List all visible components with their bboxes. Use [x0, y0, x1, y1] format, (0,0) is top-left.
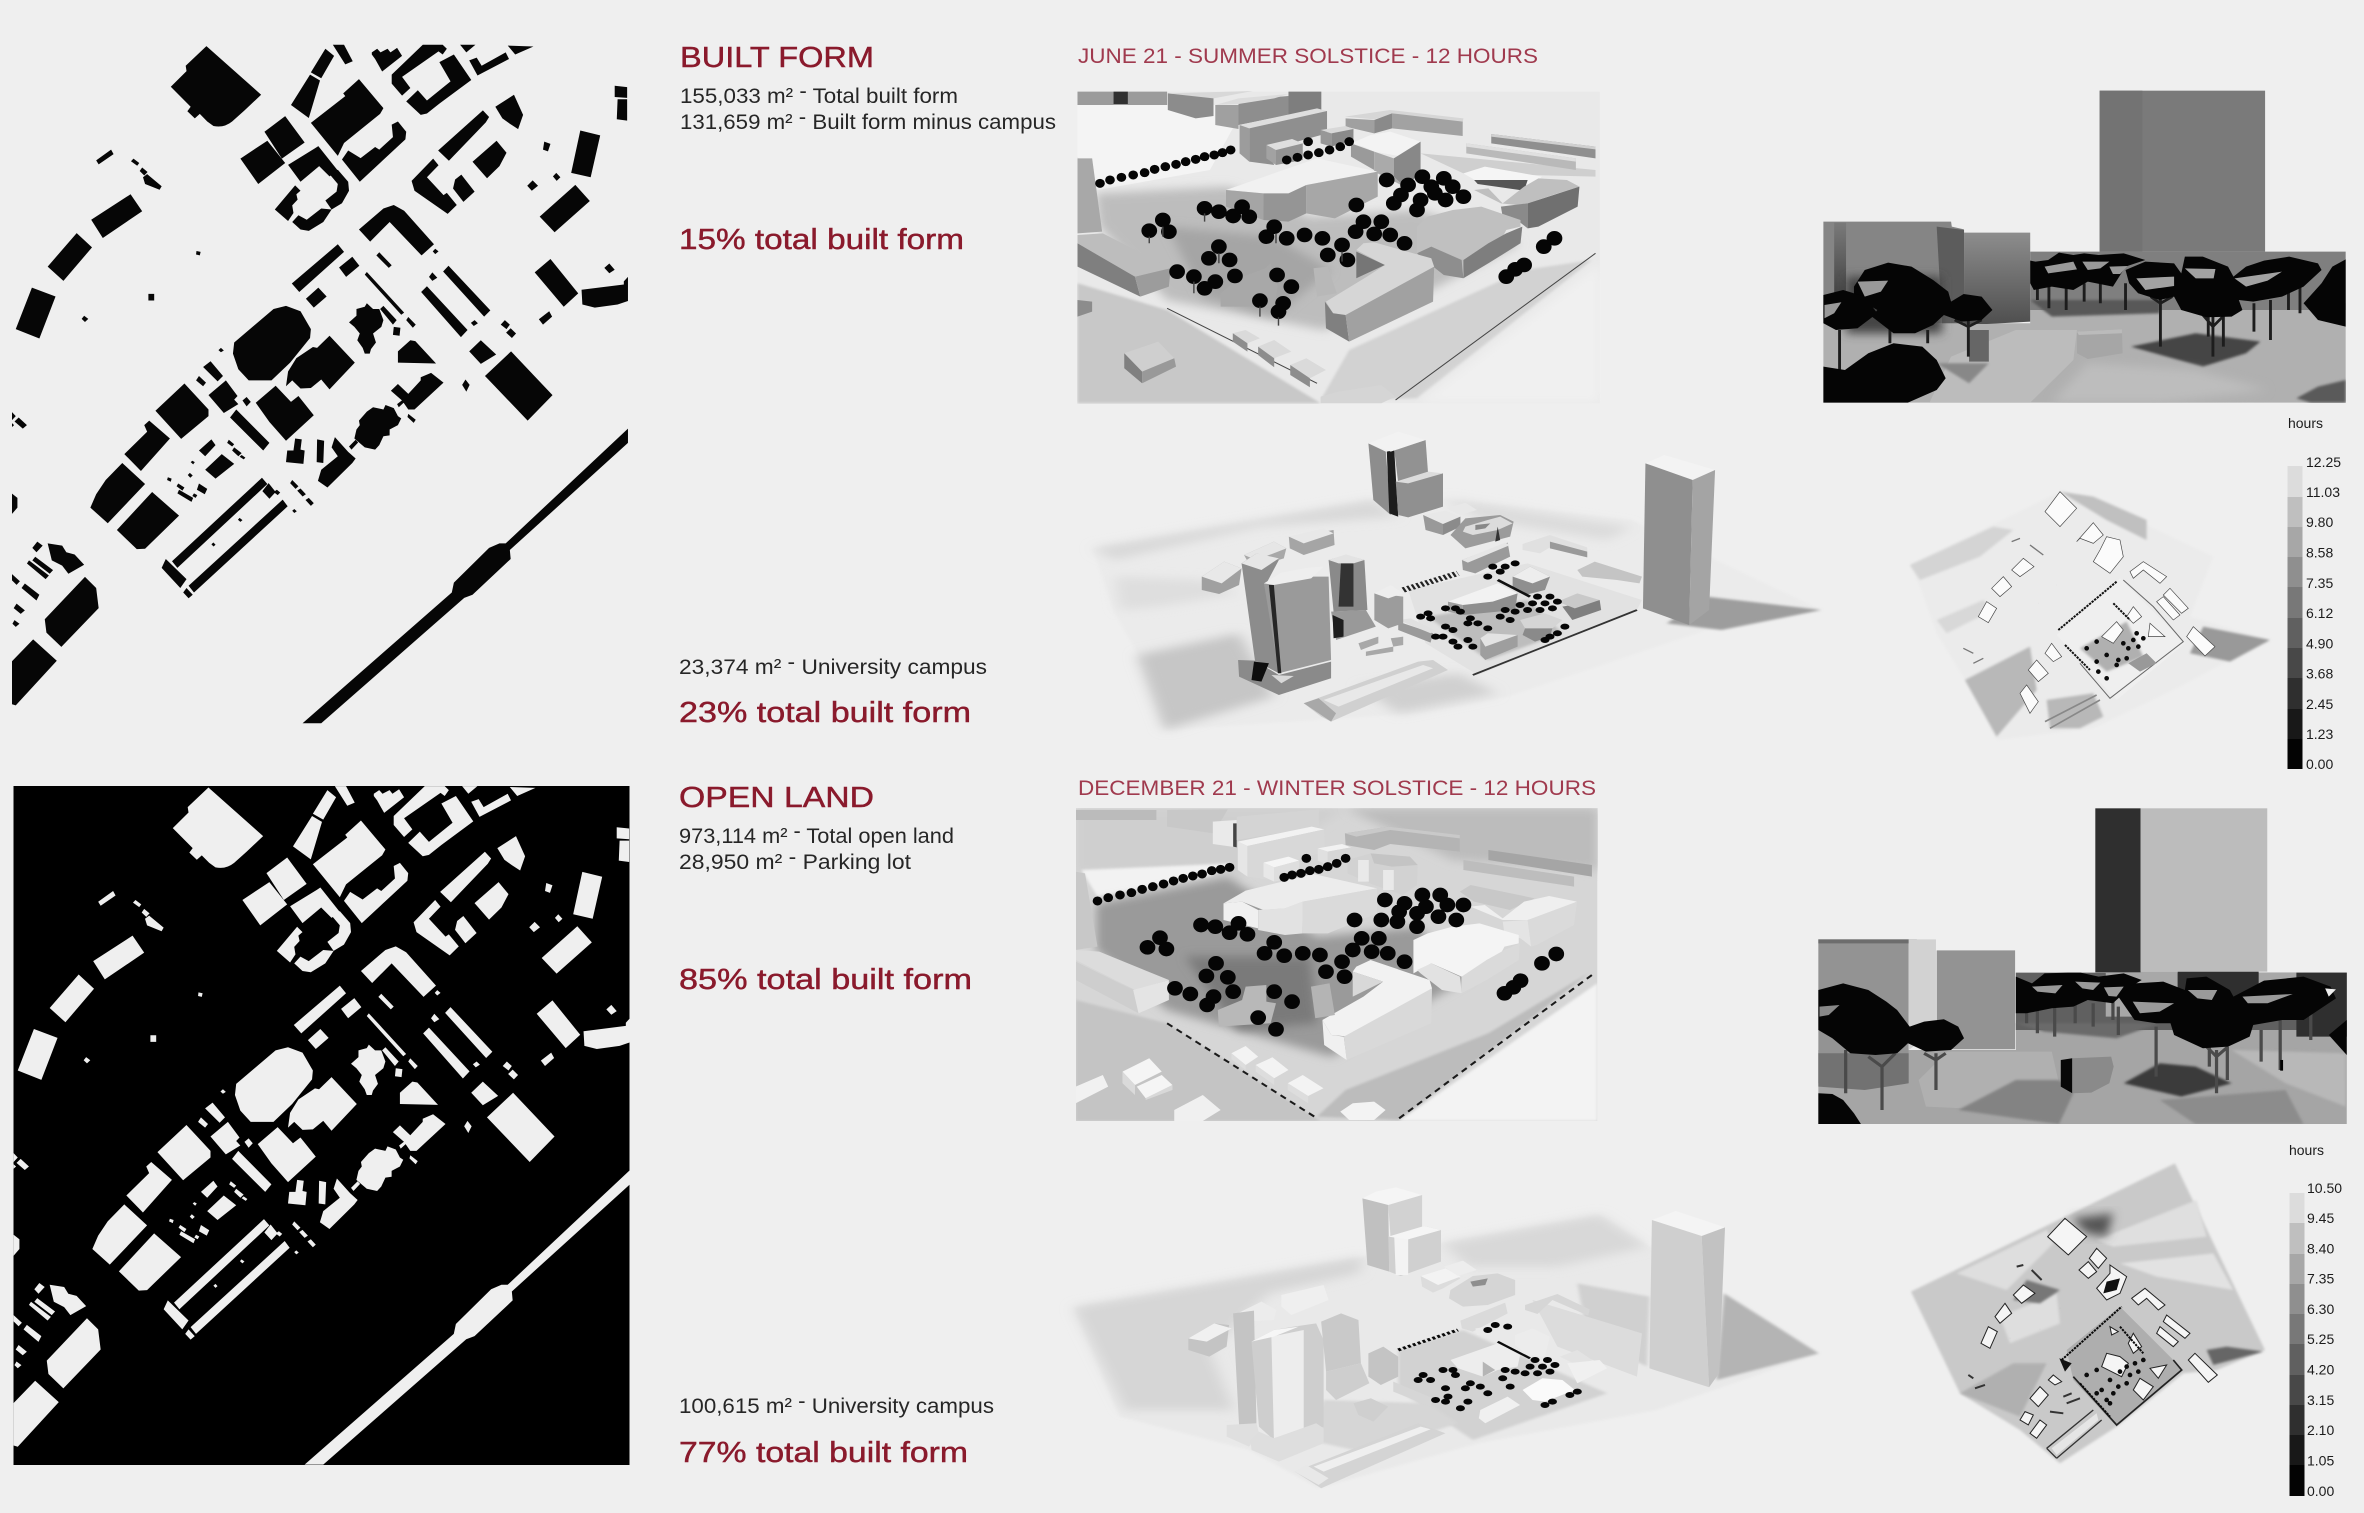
campus built area: -: [788, 651, 795, 674]
legend values: 9.80: [2306, 514, 2333, 530]
open land figures: -: [794, 820, 801, 843]
summer legend: hours: [2288, 415, 2323, 431]
legend values: 12.25: [2306, 454, 2341, 470]
campus open area: University campus: [806, 1395, 994, 1418]
winter close-up aerial render: [1076, 808, 1597, 1121]
winter top-down site map: [1911, 1163, 2265, 1463]
campus built area: 23,374 m²: [679, 656, 774, 679]
summer legend: [2288, 415, 2341, 772]
legend values: 3.68: [2306, 666, 2333, 682]
legend values: 1.05: [2307, 1452, 2334, 1468]
legend values: 1.23: [2306, 726, 2333, 742]
built form figures: 131,659 m²: [680, 111, 786, 134]
legend values: [2307, 1180, 2342, 1499]
open land figures: 28,950 m²: [679, 851, 774, 874]
legend values: 5.25: [2307, 1331, 2334, 1347]
legend colour scale: [2290, 1193, 2304, 1496]
winter legend: hours: [2289, 1142, 2324, 1158]
built form figures: -: [799, 80, 807, 103]
stat: 85% open land: 85% total built form: [679, 964, 972, 996]
open land figures: 973,114 m²: [679, 825, 784, 848]
summer far view render: [1823, 91, 2346, 403]
summer top-down site map: [1910, 492, 2270, 740]
legend values: 8.58: [2306, 544, 2333, 560]
built form figures: [680, 80, 1056, 134]
open land figures: -: [789, 846, 796, 869]
built form figures: Total built form: [807, 85, 958, 108]
figure-ground plan: open land: [14, 786, 630, 1465]
heading: open land: OPEN LAND: [679, 782, 874, 814]
legend values: [2306, 454, 2341, 772]
legend values: 4.20: [2307, 1362, 2334, 1378]
legend colour scale: [2288, 466, 2302, 769]
legend values: 8.40: [2307, 1240, 2334, 1256]
summer oblique site model: [1092, 432, 1821, 730]
winter oblique site model: [1074, 1187, 1819, 1488]
legend values: 2.45: [2306, 696, 2333, 712]
heading: winter solstice: DECEMBER 21 - WINTER SOLSTICE - 12 HOURS: [1078, 776, 1596, 800]
legend values: 2.10: [2307, 1422, 2334, 1438]
legend values: 10.50: [2307, 1180, 2342, 1196]
legend values: 6.30: [2307, 1301, 2334, 1317]
built form figures: -: [799, 106, 806, 129]
summer close-up aerial render: [1077, 91, 1600, 403]
winter legend: [2289, 1142, 2342, 1499]
campus open area: -: [798, 1390, 806, 1413]
legend values: 6.12: [2306, 605, 2333, 621]
built form figures: 155,033 m²: [680, 85, 786, 108]
stat: 77% open land: 77% total built form: [679, 1437, 968, 1469]
stat: 23% built form: 23% total built form: [679, 697, 971, 729]
legend values: 0.00: [2307, 1483, 2334, 1499]
heading: built form: BUILT FORM: [680, 42, 874, 74]
legend values: 4.90: [2306, 636, 2333, 652]
campus open area: 100,615 m²: [679, 1395, 785, 1418]
stat: 15% built form: 15% total built form: [679, 224, 964, 256]
open land figures: Parking lot: [796, 851, 911, 874]
legend values: 11.03: [2306, 484, 2340, 500]
winter far view render: [1818, 808, 2347, 1124]
legend values: 9.45: [2307, 1210, 2334, 1226]
legend values: 7.35: [2307, 1270, 2334, 1286]
legend values: 0.00: [2306, 756, 2333, 772]
legend values: 3.15: [2307, 1392, 2334, 1408]
heading: summer solstice: JUNE 21 - SUMMER SOLSTICE - 12 HOURS: [1078, 44, 1538, 68]
campus built area: University campus: [795, 656, 987, 679]
open land figures: [679, 820, 954, 874]
legend values: 7.35: [2306, 575, 2333, 591]
figure-ground plan: built form: [12, 45, 628, 723]
open land figures: Total open land: [801, 825, 954, 848]
built form figures: Built form minus campus: [806, 111, 1056, 134]
